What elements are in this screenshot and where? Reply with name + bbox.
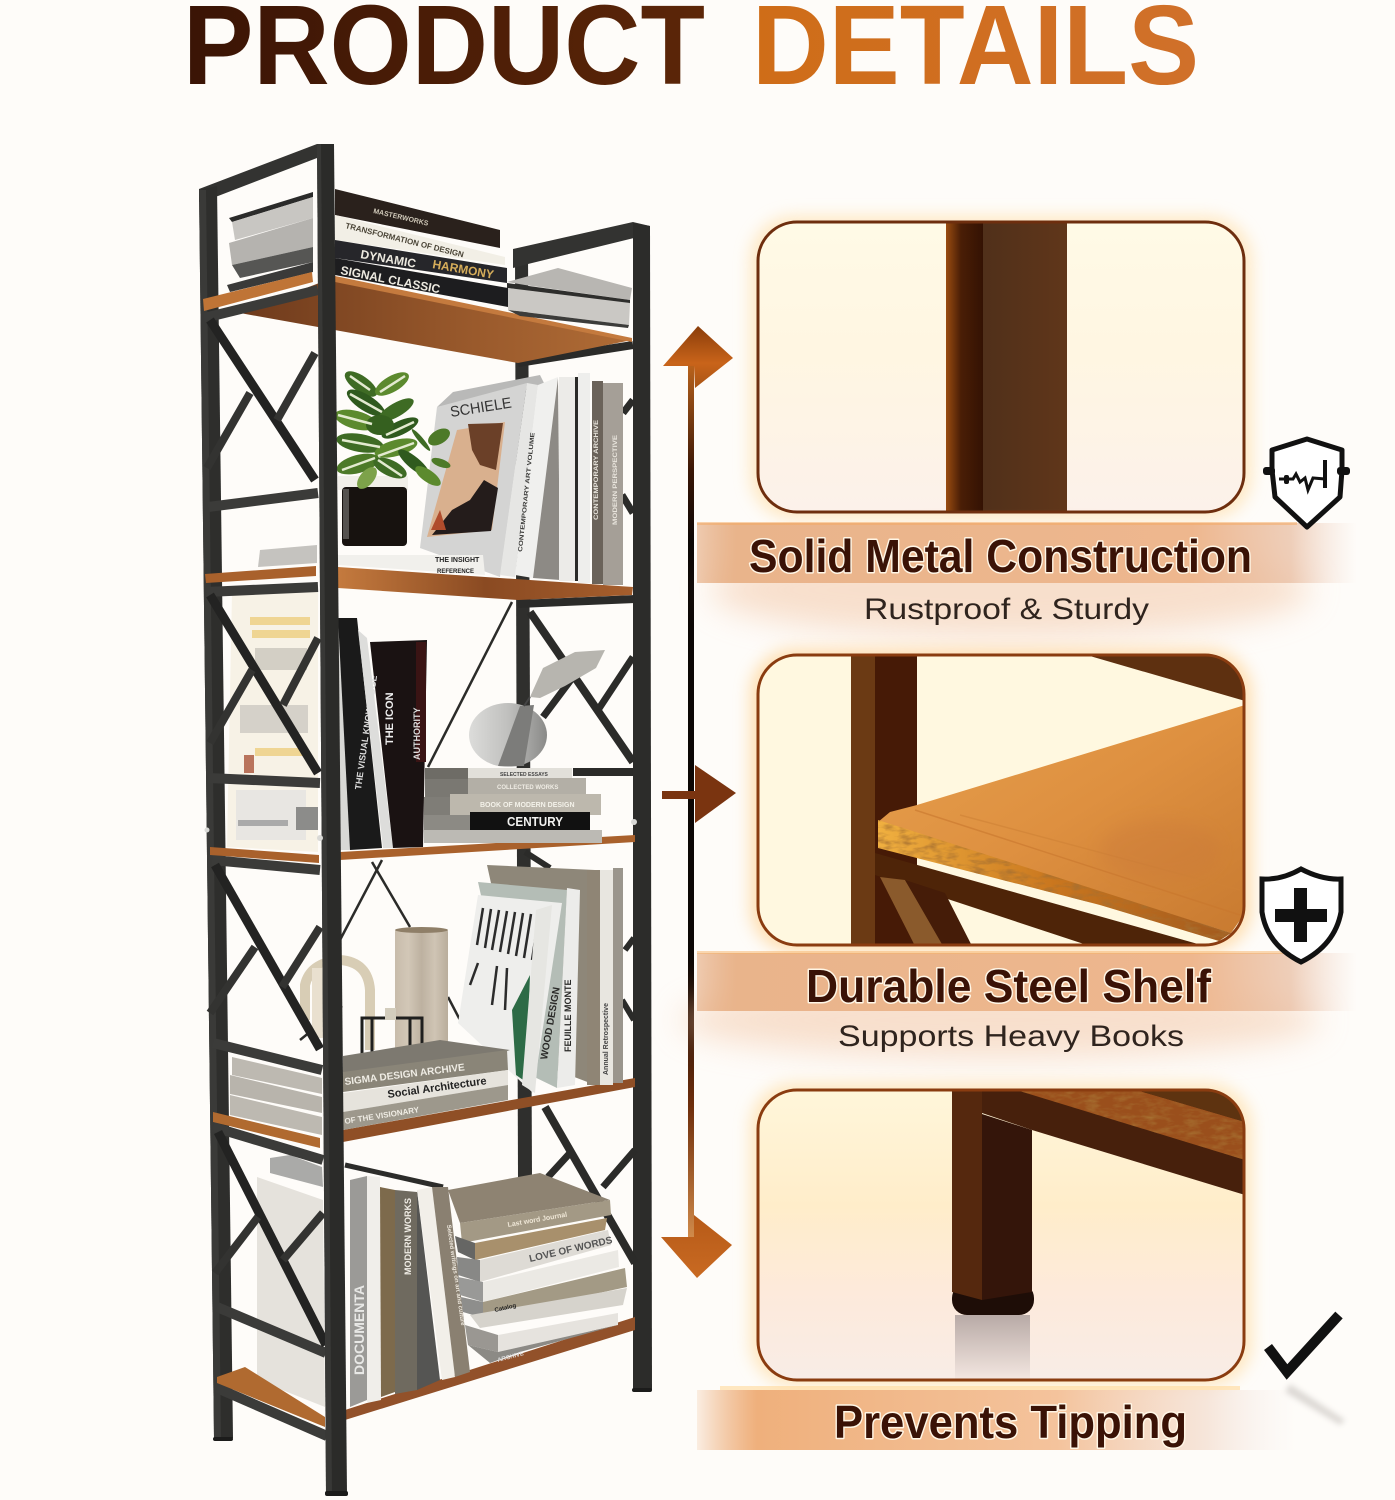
books: top shelf right: MASTERWORKS — [373, 208, 429, 228]
center front post — [317, 144, 348, 1496]
books: shelf 3 black spines: THE ICON — [384, 692, 396, 745]
books: shelf 3 black spines: AUTHORITY — [412, 708, 422, 760]
metal post close-up — [946, 221, 1067, 513]
leg close-up — [952, 1089, 1245, 1379]
vase with feather — [469, 650, 605, 767]
arrowhead: top — [663, 326, 733, 388]
books: shelf 2 low stack — [258, 545, 485, 575]
books: shelf 2 Schiele book: SCHIELE — [449, 394, 513, 421]
shelf 3 right — [340, 835, 635, 860]
icon: shield with pulse — [1263, 439, 1350, 527]
decor: arch, ribbed vase and cube — [305, 927, 448, 1063]
icon: shield with plus — [1262, 869, 1341, 962]
books: bottom shelf flat stack — [448, 1173, 627, 1364]
books: shelf 2 low stack: THE INSIGHT — [435, 557, 480, 564]
books: shelf 3 flat stack: SELECTED ESSAYS — [500, 772, 549, 778]
shelf 2 right — [338, 567, 633, 600]
back frame posts — [513, 222, 652, 1392]
books: top shelf right: HARMONY — [431, 257, 495, 282]
panel: metal construction — [750, 216, 1252, 519]
shelf 4 right — [343, 1078, 635, 1142]
books: bottom shelf upright: MODERN WORKS — [403, 1198, 413, 1275]
books: shelf 3 black spines: THE VISUAL KNOWLEDGE — [353, 675, 379, 790]
label band: durable steel shelf — [680, 951, 1357, 1058]
books: shelf 2 low stack: REFERENCE — [437, 569, 474, 575]
heading: Prevents Tipping — [834, 1396, 1187, 1448]
shelf bolts — [204, 819, 637, 841]
books: shelf 4 stacks: SIGMA DESIGN ARCHIVE — [344, 1062, 466, 1088]
books: bottom shelf upright — [257, 1155, 470, 1407]
books: top shelf small stack — [507, 268, 632, 328]
heading: Durable Steel Shelf — [806, 960, 1212, 1012]
right side braces — [300, 345, 635, 1263]
books: bottom shelf upright: DOCUMENTA — [351, 1285, 367, 1375]
arrowhead: middle — [662, 765, 736, 823]
books: shelf 3 flat stack: COLLECTED WORKS — [497, 785, 558, 791]
panel: steel shelf — [750, 649, 1252, 952]
books: shelf 4 upright: FEUILLE MONTE — [563, 980, 573, 1052]
books: shelf 2 Schiele book: CONTEMPORARY ART VOLUME — [518, 432, 537, 552]
bookshelf illustration — [199, 144, 652, 1496]
books: shelf 2 Schiele book: CONTEMPORARY ARCHIVE — [594, 420, 600, 520]
books: shelf 4 stacks: OF THE VISIONARY — [344, 1105, 420, 1126]
books: shelf 3 flat stack: CENTURY — [507, 814, 563, 829]
books: top shelf right: SIGNAL CLASSIC — [339, 263, 442, 296]
shelf 1 right — [240, 276, 632, 363]
plant — [332, 367, 453, 546]
books: shelf 3 black spines — [338, 618, 427, 850]
books: shelf 2 Schiele book — [420, 373, 623, 585]
books: shelf 4 stacks — [230, 1040, 510, 1135]
heading: Solid Metal Construction — [749, 530, 1252, 582]
label band: prevents tipping — [697, 1386, 1297, 1450]
books: shelf 4 stacks: Social Architecture — [387, 1075, 487, 1101]
left side braces — [204, 290, 327, 1436]
arrow line — [688, 366, 694, 1237]
books: bottom shelf flat stack: Catalog — [494, 1303, 517, 1314]
books: shelf 2 Schiele book: MODERN PERSPECTIVE — [613, 435, 619, 525]
books: shelf 3 flat stack: BOOK OF MODERN DESIGN — [480, 802, 575, 809]
panel: anti-tip foot — [750, 1083, 1252, 1386]
books: bottom shelf flat stack: LOVE OF WORDS — [528, 1235, 614, 1265]
subheading: Rustproof & Sturdy — [864, 593, 1149, 626]
books: bottom shelf upright: Selected writings on art and culture — [445, 1224, 465, 1327]
label band: solid metal construction — [697, 522, 1357, 638]
books: shelf 4 upright: WOOD DESIGN — [539, 986, 563, 1061]
books: top shelf right: DYNAMIC — [359, 247, 417, 271]
books: top shelf right — [335, 189, 508, 307]
shelf 5 right — [345, 1317, 635, 1420]
title — [183, 0, 1199, 108]
shelf close-up — [851, 654, 1245, 946]
icon: check mark — [1268, 1315, 1345, 1425]
left side frame — [199, 144, 317, 1441]
books: bottom shelf flat stack: Last word Journal — [507, 1212, 568, 1229]
books: shelf 4 upright: Annual Retrospective — [603, 1003, 610, 1075]
books: shelf 3 left open book — [227, 587, 318, 852]
left shelf pieces — [203, 272, 325, 1427]
books: bottom shelf flat stack: ARCHIVE — [497, 1351, 525, 1364]
books: top shelf left — [227, 192, 313, 292]
arrowhead: bottom — [661, 1215, 732, 1278]
books: shelf 4 upright — [458, 865, 623, 1093]
subheading: Supports Heavy Books — [838, 1020, 1184, 1053]
vertical dimension arrow — [661, 326, 736, 1278]
books: shelf 3 flat stack — [424, 768, 602, 843]
books: top shelf right: TRANSFORMATION OF DESIGN — [345, 221, 465, 259]
